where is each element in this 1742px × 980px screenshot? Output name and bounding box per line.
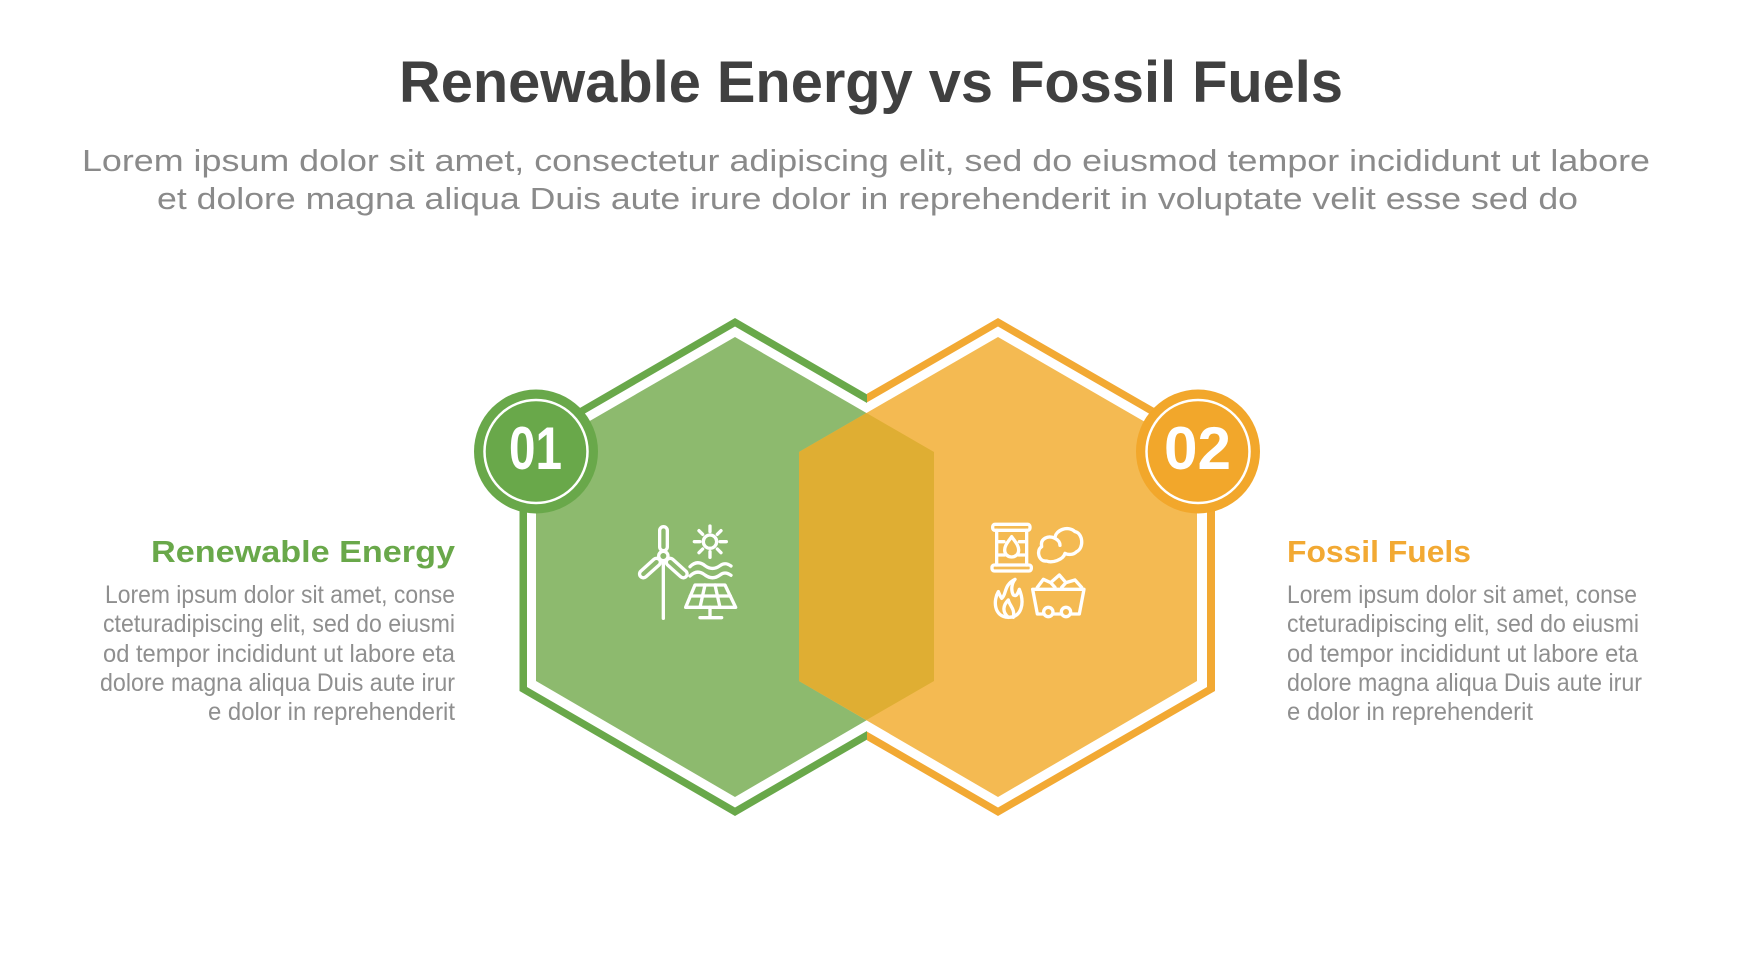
icon: water waves <box>690 563 731 578</box>
subtitle text block: Lorem ipsum dolor sit amet, consectetur adipiscing elit, sed do eiusmod tempor incididunt ut labore <box>82 143 1650 178</box>
title: Renewable Energy vs Fossil Fuels <box>399 50 1343 115</box>
icon: renewable energy <box>638 526 736 618</box>
panel: fossil fuels text <box>1287 534 1642 726</box>
subtitle text block <box>82 143 1650 216</box>
orange hexagon outline <box>867 318 1215 816</box>
green hexagon fill <box>536 337 934 797</box>
badge 01: 01 <box>509 415 562 482</box>
green hexagon outline <box>520 318 867 816</box>
description: renewable energy: dolore magna aliqua Duis aute irur <box>100 669 455 697</box>
icon: wind turbine <box>638 527 689 618</box>
icon: solar panel <box>686 585 736 618</box>
overlap area <box>799 413 934 720</box>
icon: oil barrel <box>992 524 1031 571</box>
hexagon venn diagram <box>520 318 1215 816</box>
description: fossil fuels: od tempor incididunt ut labore eta <box>1287 640 1638 668</box>
icon: smoke cloud <box>1039 529 1082 562</box>
description: renewable energy <box>100 581 455 726</box>
heading: fossil fuels: Fossil Fuels <box>1287 534 1471 569</box>
description: renewable energy: e dolor in reprehenderit <box>208 698 455 726</box>
description: renewable energy: cteturadipiscing elit, sed do eiusmi <box>103 610 455 638</box>
badge 01 <box>474 390 598 514</box>
subtitle text block: et dolore magna aliqua Duis aute irure dolor in reprehenderit in voluptate velit esse sed do <box>157 181 1578 216</box>
description: fossil fuels <box>1287 581 1642 726</box>
orange hexagon fill <box>799 337 1197 797</box>
description: fossil fuels: dolore magna aliqua Duis aute irur <box>1287 669 1642 697</box>
description: fossil fuels: Lorem ipsum dolor sit amet, conse <box>1287 581 1637 609</box>
description: fossil fuels: e dolor in reprehenderit <box>1287 698 1533 726</box>
heading: renewable energy: Renewable Energy <box>151 534 456 569</box>
infographic canvas <box>84 60 1648 816</box>
badge 02 <box>1136 390 1260 514</box>
description: renewable energy: od tempor incididunt ut labore eta <box>103 640 455 668</box>
panel: renewable energy text <box>100 534 456 726</box>
description: renewable energy: Lorem ipsum dolor sit amet, conse <box>105 581 455 609</box>
description: fossil fuels: cteturadipiscing elit, sed do eiusmi <box>1287 610 1639 638</box>
icon: fossil fuels <box>992 524 1084 617</box>
icon: sun <box>694 526 726 557</box>
icon: coal cart <box>1033 575 1084 617</box>
badge 02: 02 <box>1164 415 1231 482</box>
icon: flame <box>995 579 1022 617</box>
